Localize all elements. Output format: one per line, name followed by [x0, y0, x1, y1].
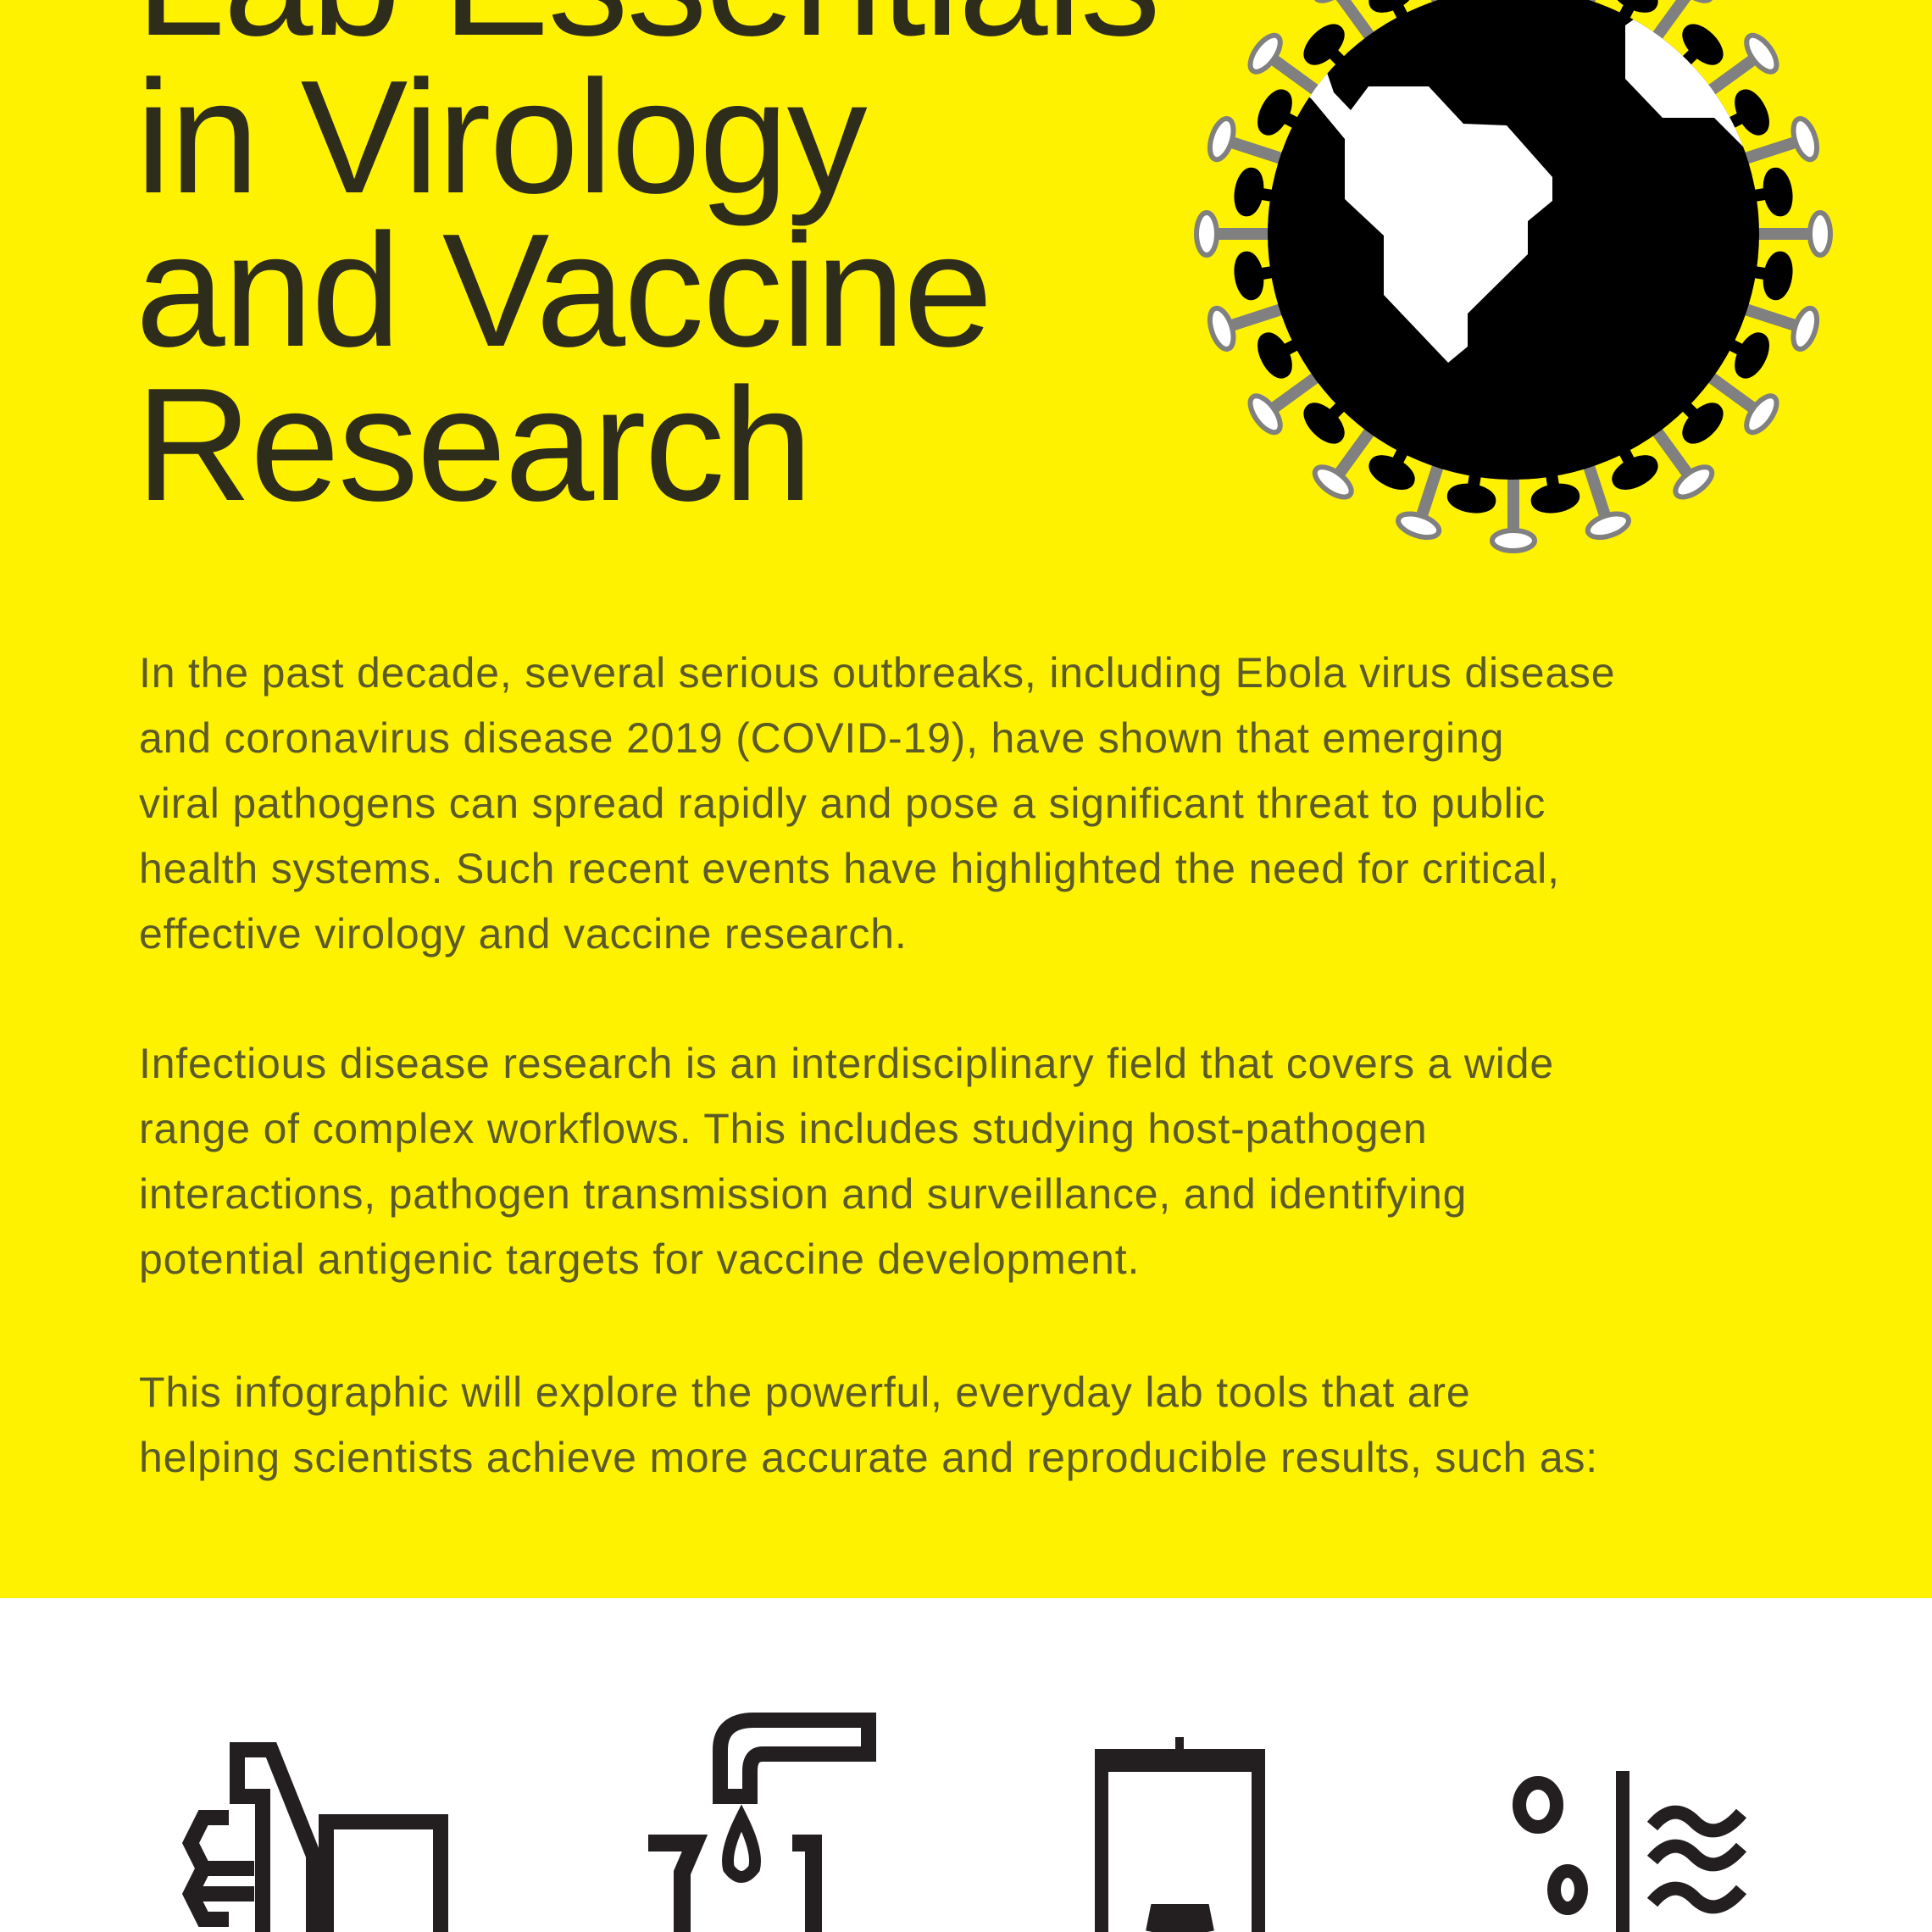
icon: lab bottle [1095, 1737, 1265, 1932]
intro paragraph 3: This infographic will explore the powerful, everyday lab tools that are [139, 1368, 1470, 1416]
icon: virus globe [1194, 0, 1833, 553]
intro paragraph 2 [139, 1040, 1554, 1283]
intro paragraph 1: viral pathogens can spread rapidly and pose a significant threat to public [139, 780, 1546, 827]
title: and Vaccine [136, 201, 991, 380]
title: Research [136, 355, 811, 535]
icon: tap and filter funnel [648, 1713, 876, 1932]
intro paragraph 1: effective virology and vaccine research. [139, 910, 908, 958]
intro paragraph 3 [139, 1368, 1598, 1481]
title: in Virology [136, 47, 866, 227]
intro paragraph 3: helping scientists achieve more accurate and reproducible results, such as: [139, 1434, 1598, 1481]
intro paragraph 1: health systems. Such recent events have highlighted the need for critical, [139, 845, 1560, 892]
intro paragraph 1: and coronavirus disease 2019 (COVID-19), have shown that emerging [139, 714, 1504, 762]
icon: pipette in hand [182, 1742, 448, 1932]
intro paragraph 2: potential antigenic targets for vaccine development. [139, 1235, 1140, 1283]
title [136, 0, 1159, 535]
intro paragraph 1 [139, 649, 1615, 958]
icon: percentage and waves [1513, 1771, 1746, 1932]
intro paragraph 2: Infectious disease research is an interdisciplinary field that covers a wide [139, 1040, 1554, 1087]
intro paragraph 1: In the past decade, several serious outbreaks, including Ebola virus disease [139, 649, 1615, 697]
intro paragraph 2: interactions, pathogen transmission and surveillance, and identifying [139, 1170, 1467, 1218]
intro paragraph 2: range of complex workflows. This includes studying host-pathogen [139, 1105, 1428, 1152]
